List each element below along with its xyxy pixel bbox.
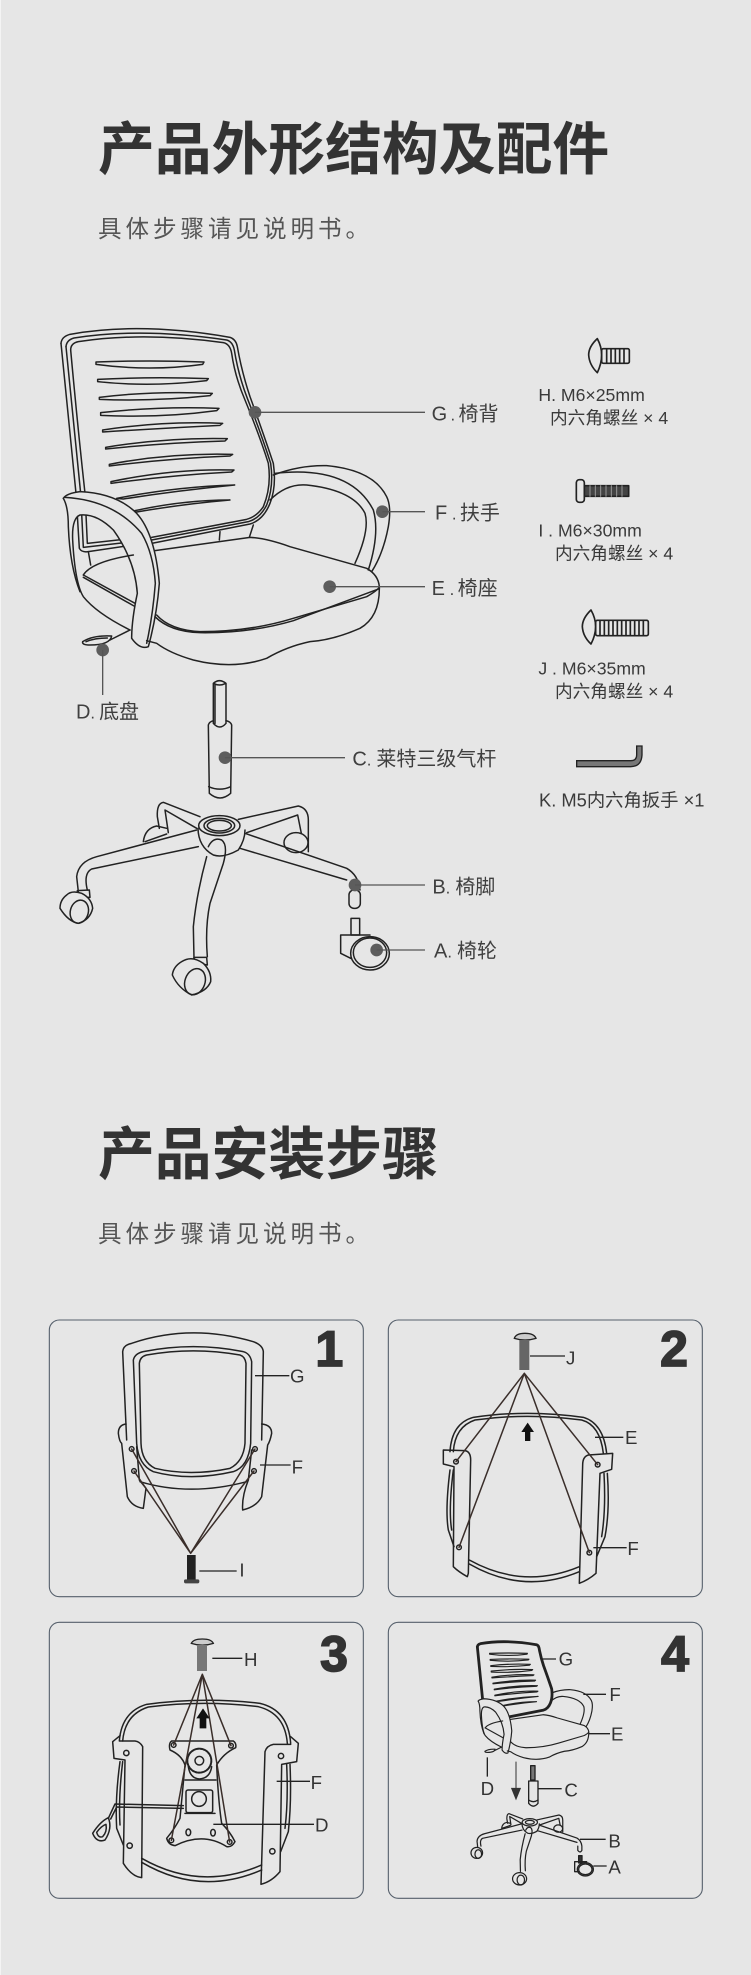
caster small	[575, 1856, 593, 1876]
chair back rear view	[118, 1333, 272, 1553]
callout: D chassis: D.底盘	[76, 701, 139, 724]
callout: A caster	[370, 940, 497, 963]
callout: C gas lift: C.莱特三级气杆	[352, 747, 496, 770]
icon: screw I	[184, 1555, 199, 1583]
chair back	[61, 329, 274, 552]
icon: H screw	[589, 339, 629, 373]
panel: step 1	[49, 1320, 363, 1597]
callout: E seat: E.椅座	[432, 577, 498, 600]
seat	[83, 525, 379, 665]
callouts: I	[239, 1560, 245, 1581]
panel: step 4	[388, 1622, 702, 1898]
icon: screw H	[191, 1639, 213, 1671]
gas lift small	[529, 1766, 538, 1806]
callouts: B	[608, 1831, 621, 1852]
callout: A caster: A.椅轮	[434, 940, 497, 963]
accessory K hex wrench	[539, 746, 704, 811]
label: H screw: H. M6×25mm	[538, 385, 645, 405]
icon: down arrow	[512, 1762, 520, 1799]
lever handle	[93, 1804, 183, 1841]
heading: installation steps: 产品安装步骤	[98, 1124, 439, 1187]
callouts	[199, 1366, 305, 1581]
callouts: E	[625, 1427, 637, 1448]
panel frame	[388, 1622, 702, 1898]
callouts: D	[481, 1778, 494, 1799]
callouts: E	[611, 1723, 623, 1744]
callouts: F	[311, 1772, 322, 1793]
chair upper assembly illustration	[61, 329, 390, 665]
assembled chair top	[477, 1642, 592, 1759]
icon: I screw	[576, 480, 629, 502]
subheading: see manual: 具体步骤请见说明书。	[98, 1221, 373, 1248]
panel frame	[49, 1320, 363, 1597]
five-star base with casters	[60, 802, 360, 998]
callouts	[212, 1649, 328, 1836]
icon: up arrow	[521, 1423, 534, 1441]
callout: F armrest	[376, 501, 500, 524]
callouts	[530, 1347, 639, 1559]
callouts: G	[559, 1649, 573, 1670]
label: H screw: 内六角螺丝 × 4	[550, 408, 668, 428]
callout: B chair leg: B.椅脚	[432, 875, 495, 898]
heading: product structure: 产品外形结构及配件	[98, 119, 609, 182]
seat underside	[443, 1373, 613, 1583]
callouts: D	[315, 1815, 328, 1836]
step number 3: 3	[320, 1626, 348, 1682]
callout: G chair back: G.椅背	[432, 403, 499, 426]
base small	[471, 1814, 582, 1885]
callout: B chair leg	[349, 875, 495, 898]
callout: C gas lift	[219, 747, 496, 770]
label: J screw: 内六角螺丝 × 4	[555, 681, 673, 701]
callouts: A	[608, 1856, 621, 1877]
height lever handle	[83, 630, 130, 645]
callouts: J	[566, 1347, 575, 1368]
gas lift illustration	[208, 681, 232, 798]
callout: E seat	[323, 577, 498, 600]
callout: F armrest: F.扶手	[435, 501, 500, 524]
chassis plate D	[167, 1674, 236, 1847]
icon: J screw	[582, 610, 648, 644]
label: J screw: J . M6×35mm	[538, 658, 646, 678]
icon: screw J	[514, 1333, 536, 1370]
callout: D chassis	[76, 644, 139, 724]
accessory H screw	[538, 339, 668, 428]
armrests	[63, 466, 390, 647]
label: I screw: I . M6×30mm	[538, 521, 642, 541]
callouts: C	[564, 1780, 578, 1801]
panel frame	[49, 1622, 363, 1898]
icon: up arrow	[196, 1708, 210, 1728]
label: hex wrench: K. M5内六角扳手 ×1	[539, 790, 704, 811]
callouts: F	[627, 1538, 639, 1559]
caster A part	[341, 918, 389, 970]
step number 4: 4	[661, 1626, 689, 1682]
panel frame	[388, 1320, 702, 1597]
callout: G chair back	[249, 403, 499, 426]
accessory J screw	[538, 610, 673, 701]
seat underside and arms	[113, 1700, 298, 1884]
panel: step 2	[388, 1320, 702, 1597]
accessory I screw	[538, 480, 673, 564]
callouts	[481, 1649, 623, 1877]
step number 1: 1	[315, 1321, 343, 1377]
subheading: see manual: 具体步骤请见说明书。	[98, 216, 373, 243]
callouts: F	[609, 1684, 621, 1705]
panel: step 3	[49, 1622, 363, 1898]
icon: hex wrench	[577, 746, 642, 767]
callouts: F	[292, 1456, 303, 1477]
step number 2: 2	[660, 1321, 688, 1377]
callouts: G	[290, 1366, 305, 1387]
label: I screw: 内六角螺丝 × 4	[555, 544, 673, 564]
callouts: H	[244, 1649, 257, 1670]
